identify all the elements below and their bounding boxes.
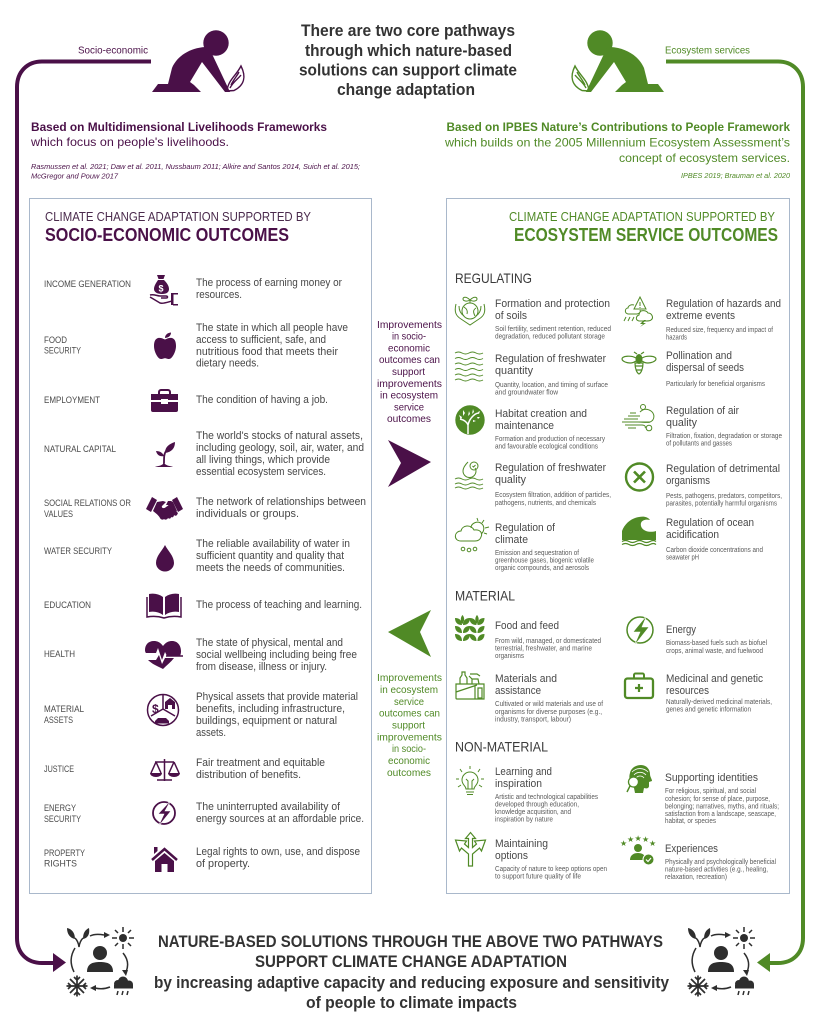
item: materials and assistance: assistance <box>495 685 541 697</box>
item: regulation of hazards <box>624 297 781 342</box>
item: habitat creation and maintenance: and favourable ecological conditions <box>495 444 598 450</box>
item: supporting identities: For religious, spiritual, and social <box>665 788 756 795</box>
item: regulation of freshwater quality: Ecosystem filtration, addition of particles, <box>495 492 611 499</box>
item: regulation of air quality <box>622 404 782 448</box>
item: experiences: ★ <box>634 834 642 843</box>
item: supporting identities: habitat, or species <box>665 818 716 825</box>
row: health: from disease, illness or injury. <box>196 661 327 673</box>
row: education: EDUCATION <box>44 600 91 610</box>
item: supporting identities: cohesion; for sense of place, purpose, <box>665 796 770 803</box>
text: IPBES framework: concept of ecosystem services. <box>619 151 790 165</box>
item: regulation of detrimental organisms: Pests, pathogens, predators, competitors, <box>666 493 782 500</box>
item: pollination and dispersal of seeds <box>622 350 765 388</box>
text: livelihoods framework: Rasmussen et al. 2021; Daw et al. 2011, Nussbaum 2011; Alkire and Santos 2014, Suich et al. 2015; <box>31 162 360 171</box>
item: experiences: ★ <box>620 839 627 848</box>
item: experiences: nature-based activities (e.g., healing, <box>665 866 768 874</box>
item: regulation of detrimental organisms: organisms <box>666 475 710 487</box>
row: natural capital: essential ecosystem services. <box>196 466 326 478</box>
row: material assets: benefits, including infrastructure, <box>196 703 345 715</box>
text: ecosystem to socio-economic: in ecosystem <box>380 685 438 696</box>
item: regulation of freshwater quality: quality <box>495 474 526 486</box>
text: ecosystem to socio-economic: improvements <box>377 732 442 744</box>
icon: adaptation cycle left <box>66 927 134 996</box>
row: social relations or values: individuals or groups. <box>196 508 299 520</box>
text: socio-economic to ecosystem: economic <box>388 344 430 354</box>
row: justice <box>44 757 325 781</box>
item: materials and assistance: Cultivated or wild materials and use of <box>495 701 603 708</box>
item: regulation of climate: Regulation of <box>495 522 556 534</box>
text: ecosystem to socio-economic: Improvements <box>377 673 442 684</box>
row: justice: JUSTICE <box>44 764 74 774</box>
text: socio-economic to ecosystem <box>377 320 442 425</box>
item: regulation of freshwater quantity <box>455 352 608 396</box>
title: through which nature-based <box>305 42 512 60</box>
row: health <box>44 637 357 673</box>
row: food security: nutritious food that meets their <box>196 346 338 358</box>
item: regulation of freshwater quantity: quantity <box>495 365 533 377</box>
text: IPBES framework: IPBES 2019; Brauman et al. 2020 <box>681 171 791 180</box>
text: livelihoods framework: which focus on people's livelihoods. <box>30 135 229 149</box>
item: experiences: relaxation, recreation) <box>665 874 727 881</box>
item: regulation of air quality: Filtration, fixation, degradation or storage <box>666 433 782 440</box>
item: energy: crops, animal waste, and fuelwood <box>666 648 763 655</box>
item: regulation of ocean acidification <box>622 517 763 562</box>
item: maintaining options <box>456 832 607 880</box>
item: regulation of ocean acidification: acidification <box>666 529 719 541</box>
item: energy <box>627 615 767 655</box>
item: regulation of freshwater quantity: Quantity, location, and timing of surface <box>495 382 608 389</box>
row: property rights: Legal rights to own, use, and dispose <box>196 846 360 858</box>
item: habitat creation and maintenance: Formation and production of necessary <box>495 436 605 443</box>
item: learning and inspiration: inspiration by nature <box>495 816 553 824</box>
panel: socio-economic outcomes <box>30 198 372 894</box>
text: socio-economic to ecosystem: improvements <box>377 379 442 390</box>
row: natural capital: The world's stocks of natural assets, <box>196 430 363 442</box>
section heading: regulating: REGULATING <box>455 270 532 286</box>
item: food and feed: terrestrial, freshwater, and marine <box>495 646 592 652</box>
row: justice: Fair treatment and equitable <box>196 757 325 769</box>
row: food security: access to sufficient, safe, and <box>196 334 326 346</box>
item: habitat creation and maintenance: maintenance <box>495 420 554 432</box>
text: IPBES framework: which builds on the 2005 Millennium Ecosystem Assessment’s <box>444 136 790 150</box>
text: ecosystem to socio-economic: in socio- <box>392 744 426 755</box>
row: energy security: SECURITY <box>44 814 81 824</box>
item: supporting identities: satisfaction from a landscape, seascape, <box>665 811 776 818</box>
item: maintaining options: Maintaining <box>495 838 548 850</box>
text: socio-economic to ecosystem: outcomes <box>387 414 431 425</box>
item: maintaining options: Capacity of nature to keep options open <box>495 866 607 873</box>
item: pollination and dispersal of seeds: Pollination and <box>666 350 732 362</box>
icon: adaptation cycle right <box>688 927 755 996</box>
text: socio-economic to ecosystem: support <box>392 367 425 378</box>
row: natural capital: NATURAL CAPITAL <box>44 444 116 454</box>
item: habitat creation and maintenance <box>455 405 605 450</box>
bottom statement: SUPPORT CLIMATE CHANGE ADAPTATION <box>255 953 567 971</box>
text: socio-economic to ecosystem: outcomes can <box>379 355 440 366</box>
text: livelihoods framework: Based on Multidimensional Livelihoods Frameworks <box>31 120 327 134</box>
text: livelihoods framework <box>30 120 360 180</box>
title: solutions can support climate <box>299 62 517 80</box>
item: regulation of ocean acidification: Carbon dioxide concentrations and <box>666 547 763 554</box>
row: property rights: PROPERTY <box>44 848 85 858</box>
text: socio-economic to ecosystem: Improvements <box>377 320 442 331</box>
item: regulation of freshwater quality: pathogens, nutrients, and chemicals <box>495 500 596 507</box>
row: water security <box>44 538 350 574</box>
row: water security: WATER SECURITY <box>44 546 112 556</box>
row: natural capital <box>44 430 364 478</box>
row: water security: meets the needs of communities. <box>196 562 345 574</box>
item: pollination and dispersal of seeds: dispersal of seeds <box>666 362 744 374</box>
text: ecosystem to socio-economic: support <box>392 720 425 732</box>
row: health: The state of physical, mental and <box>196 637 343 649</box>
item: medicinal and genetic resources: genes and genetic information <box>666 706 751 714</box>
item: energy: Biomass-based fuels such as biofuel <box>666 640 767 647</box>
row: food security: SECURITY <box>44 346 81 356</box>
row: property rights <box>44 846 360 872</box>
item: regulation of climate: organic compounds, and aerosols <box>495 565 589 572</box>
item: maintaining options: options <box>495 850 528 862</box>
text: IPBES framework <box>444 120 791 180</box>
title: change adaptation <box>337 81 475 99</box>
section heading: material: MATERIAL <box>455 588 515 604</box>
item: experiences: Physically and psychologically beneficial <box>665 859 776 866</box>
heading: socio-economic outcomes: SOCIO-ECONOMIC OUTCOMES <box>45 225 289 245</box>
item: formation and protection of soils: Soil fertility, sediment retention, reduced <box>495 326 611 333</box>
bottom statement: by increasing adaptive capacity and reducing exposure and sensitivity <box>154 974 670 992</box>
item: learning and inspiration: inspiration <box>495 778 542 790</box>
heading: ecosystem service outcomes <box>509 210 778 245</box>
item: regulation of freshwater quantity: and groundwater flow <box>495 390 559 396</box>
item: regulation of air quality: Regulation of air <box>666 405 739 417</box>
item: learning and inspiration: knowledge acquisition, and <box>495 809 571 816</box>
item: maintaining options: to support future quality of life <box>495 874 581 880</box>
row: material assets <box>44 691 358 739</box>
row: employment: EMPLOYMENT <box>44 395 101 405</box>
item: regulation of detrimental organisms <box>626 463 782 508</box>
bottom statement: NATURE-BASED SOLUTIONS THROUGH THE ABOVE TWO PATHWAYS <box>158 933 663 951</box>
text: ecosystem to socio-economic: outcomes can <box>379 708 440 720</box>
section heading: non-material: NON-MATERIAL <box>455 738 548 754</box>
row: material assets: Physical assets that provide material <box>196 691 358 703</box>
arrow: right purple <box>388 440 431 487</box>
row: food security: The state in which all people have <box>196 322 348 334</box>
row: income generation: $ <box>158 284 164 294</box>
item: regulation of freshwater quality <box>455 462 611 507</box>
row: employment: The condition of having a job. <box>196 394 328 406</box>
icon: kneeling person purple <box>152 30 244 92</box>
text: socio-economic to ecosystem: service <box>394 402 424 414</box>
item: food and feed: Food and feed <box>495 620 559 632</box>
row: income generation: resources. <box>196 289 242 301</box>
text: ecosystem to socio-economic: outcomes <box>387 768 431 779</box>
row: material assets: ASSETS <box>44 715 73 725</box>
heading: socio-economic outcomes <box>45 210 312 245</box>
item: materials and assistance: industry, transport, labour) <box>495 716 571 724</box>
row: energy security: The uninterrupted availability of <box>196 801 341 813</box>
item: food and feed: organisms <box>495 653 524 660</box>
item: supporting identities: Supporting identities <box>665 772 758 784</box>
item: regulation of hazards: hazards <box>666 334 687 342</box>
text: IPBES framework: Based on IPBES Nature’s Contributions to People Framework <box>446 120 790 134</box>
bottom statement: of people to climate impacts <box>306 994 517 1012</box>
item: formation and protection of soils: Formation and protection <box>495 298 610 310</box>
item: regulation of hazards: Regulation of hazards and <box>666 298 781 310</box>
item: materials and assistance: organisms for diverse purposes (e.g., <box>495 709 602 716</box>
item: learning and inspiration: Artistic and technological capabilities <box>495 794 598 801</box>
item: regulation of hazards: Reduced size, frequency and impact of <box>666 327 773 334</box>
item: materials and assistance <box>456 672 603 724</box>
row: energy security: energy sources at an affordable price. <box>196 813 364 825</box>
row: natural capital: including geology, soil, air, water, and <box>196 442 364 454</box>
icon: kneeling person green <box>572 30 664 92</box>
text: ecosystem to socio-economic: economic <box>388 756 430 767</box>
row: health: social wellbeing including being free <box>196 649 357 661</box>
row: water security: sufficient quantity and quality that <box>196 550 344 562</box>
item: learning and inspiration <box>456 766 598 824</box>
row: food security <box>44 322 348 370</box>
item: pollination and dispersal of seeds: Particularly for beneficial organisms <box>666 381 765 388</box>
item: regulation of climate: greenhouse gases, biogenic volatile <box>495 558 594 564</box>
item: medicinal and genetic resources: resources <box>666 685 709 697</box>
row: food security: FOOD <box>44 335 67 345</box>
row: material assets: assets. <box>196 727 226 739</box>
label: socio-economic: Socio-economic <box>78 46 148 56</box>
item: regulation of detrimental organisms: parasites, potentially harmful organisms <box>666 500 777 508</box>
row: energy security: ENERGY <box>44 803 76 813</box>
item: formation and protection of soils <box>455 297 611 340</box>
item: experiences: ★ <box>649 839 656 848</box>
item: learning and inspiration: Learning and <box>495 766 552 778</box>
row: water security: The reliable availability of water in <box>196 538 350 550</box>
item: supporting identities: belonging; narratives, myths, and rituals; <box>665 804 779 810</box>
row: energy security <box>44 800 364 827</box>
item: habitat creation and maintenance: Habitat creation and <box>495 408 587 420</box>
title <box>299 22 517 99</box>
heading: socio-economic outcomes: CLIMATE CHANGE ADAPTATION SUPPORTED BY <box>45 210 312 224</box>
row: food security: dietary needs. <box>196 358 259 370</box>
row: social relations or values: SOCIAL RELATIONS OR <box>44 498 131 508</box>
ecosystem services pathway arrow <box>666 62 803 972</box>
row: education: The process of teaching and learning. <box>196 599 362 611</box>
row: income generation: INCOME GENERATION <box>44 279 131 289</box>
item: regulation of air quality: quality <box>666 417 697 429</box>
item: formation and protection of soils: of soils <box>495 310 527 322</box>
item: regulation of climate <box>455 518 594 572</box>
item: medicinal and genetic resources <box>625 673 772 714</box>
title: There are two core pathways <box>301 22 515 40</box>
text: livelihoods framework: McGregor and Pouw 2017 <box>31 172 119 180</box>
text: ecosystem to socio-economic <box>377 673 442 779</box>
row: social relations or values: VALUES <box>44 509 73 519</box>
row: education <box>44 594 362 618</box>
text: ecosystem to socio-economic: service <box>394 697 424 708</box>
bottom statement <box>154 933 670 1012</box>
row: employment <box>44 390 328 412</box>
item: regulation of climate: Emission and sequestration of <box>495 550 579 557</box>
item: regulation of air quality: of pollutants and gasses <box>666 440 732 448</box>
item: materials and assistance: Materials and <box>495 673 557 685</box>
item: medicinal and genetic resources: Medicinal and genetic <box>666 673 763 685</box>
row: property rights: of property. <box>196 858 250 870</box>
row: health: HEALTH <box>44 649 75 659</box>
panel: ecosystem service outcomes <box>446 198 790 894</box>
row: material assets: MATERIAL <box>44 704 84 714</box>
item: supporting identities <box>627 765 779 825</box>
row: social relations or values <box>44 496 366 520</box>
row: justice: distribution of benefits. <box>196 769 301 781</box>
row: social relations or values: The network of relationships between <box>196 496 366 508</box>
heading: ecosystem service outcomes: CLIMATE CHANGE ADAPTATION SUPPORTED BY <box>509 210 776 224</box>
row: natural capital: all living things, which provide <box>196 454 330 466</box>
arrow: left green <box>388 610 431 657</box>
item: regulation of freshwater quality: Regulation of freshwater <box>495 462 606 474</box>
text: socio-economic to ecosystem: in socio- <box>392 332 426 342</box>
item: food and feed: From wild, managed, or domesticated <box>495 638 601 645</box>
item: regulation of freshwater quantity: Regulation of freshwater <box>495 353 606 365</box>
item: learning and inspiration: developed through education, <box>495 802 579 808</box>
item: experiences: ★ <box>642 835 649 844</box>
row: material assets: $ <box>152 702 159 716</box>
item: food and feed <box>455 615 601 660</box>
item: energy: Energy <box>666 624 696 636</box>
item: experiences: ★ <box>627 835 634 844</box>
item: regulation of detrimental organisms: Regulation of detrimental <box>666 463 780 475</box>
text: socio-economic to ecosystem: in ecosystem <box>380 390 438 402</box>
row: property rights: RIGHTS <box>44 858 77 868</box>
heading: ecosystem service outcomes: ECOSYSTEM SERVICE OUTCOMES <box>514 225 778 245</box>
item: experiences <box>620 834 776 881</box>
item: medicinal and genetic resources: Naturally-derived medicinal materials, <box>666 699 772 706</box>
item: formation and protection of soils: degradation, reduced pollutant storage <box>495 334 605 340</box>
row: income generation: The process of earning money or <box>196 277 342 289</box>
item: regulation of hazards: extreme events <box>666 310 735 322</box>
row: income generation <box>44 275 342 306</box>
item: regulation of ocean acidification: Regulation of ocean <box>666 517 754 529</box>
item: regulation of ocean acidification: seawater pH <box>666 554 699 562</box>
socio-economic pathway arrow <box>17 62 151 972</box>
row: material assets: buildings, equipment or natural <box>196 715 337 727</box>
item: experiences: Experiences <box>665 843 718 855</box>
label: ecosystem services: Ecosystem services <box>665 46 750 56</box>
item: regulation of climate: climate <box>495 534 528 546</box>
